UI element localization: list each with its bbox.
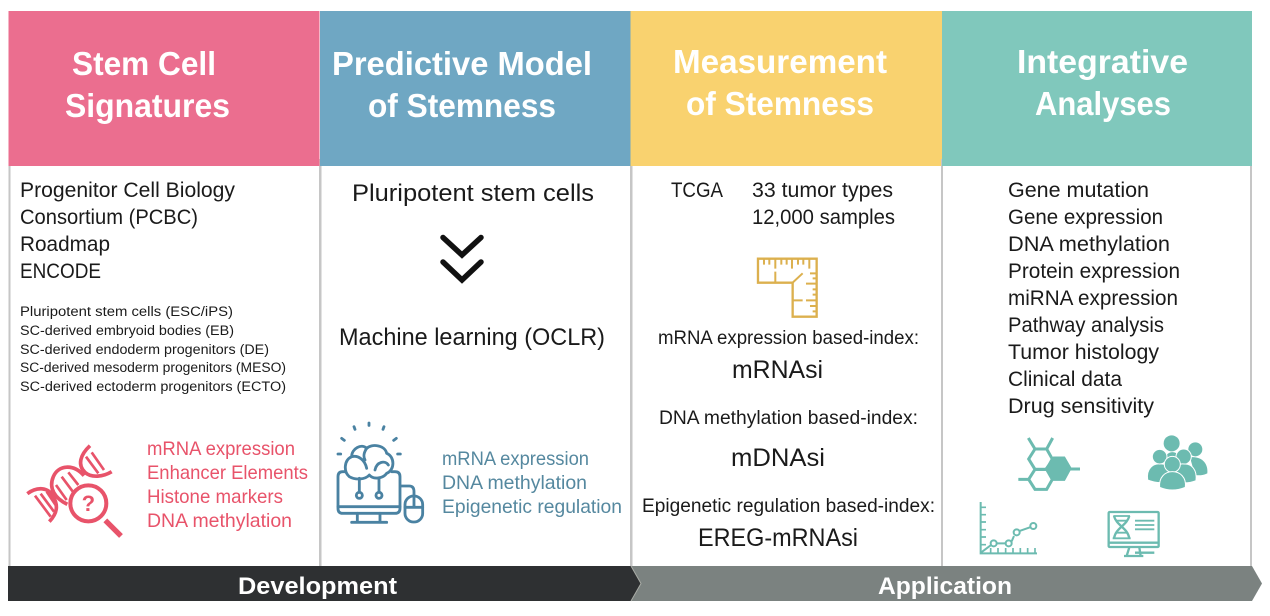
text: mrnasi: [658, 328, 919, 384]
text: model inputs: DNA methylation: [442, 472, 587, 494]
text: signature list: Enhancer Elements: [147, 462, 308, 484]
text: mrnasi: mRNA expression based-index:: [658, 328, 919, 349]
header: measurement: Measurement: [673, 43, 887, 80]
text: tcga: 33 tumor types: [752, 178, 893, 202]
text: data types: miRNA expression: [1008, 286, 1178, 310]
text: data sources: Progenitor Cell Biology: [20, 178, 235, 202]
arrow bar: development: Development: [238, 573, 397, 600]
arrow bar: development: [8, 566, 641, 601]
icon: brain computer: [338, 423, 423, 522]
text: model inputs: Epigenetic regulation: [442, 496, 622, 518]
panel: measurement of stemness: [630, 11, 942, 570]
panel: integrative analyses: [942, 11, 1252, 570]
icon: molecule: [1018, 438, 1080, 489]
text: cell types: SC-derived ectoderm progenitors (ECTO): [20, 379, 286, 394]
header: predictive model: [320, 11, 630, 166]
text: mdnasi: mDNAsi: [731, 444, 825, 472]
text: signature list: mRNA expression: [147, 438, 295, 460]
icon: people group: [1147, 435, 1207, 490]
text: data types: Gene mutation: [1008, 178, 1149, 202]
text: data sources: [20, 178, 235, 283]
header: stem cell signatures: [8, 11, 320, 166]
text: mrnasi: mRNAsi: [732, 356, 823, 384]
text: data types: Clinical data: [1008, 367, 1122, 391]
header: predictive model: Predictive Model: [332, 45, 592, 82]
text: data types: [1008, 178, 1180, 418]
arrow bar: application: [631, 566, 1262, 601]
text: data sources: Roadmap: [20, 232, 110, 256]
text: signature list: [147, 438, 308, 532]
header: measurement: [630, 11, 942, 166]
header: integrative analyses: Integrative: [1017, 43, 1188, 80]
text: data sources: ENCODE: [20, 259, 101, 283]
text: data types: Tumor histology: [1008, 340, 1159, 364]
header: stem cell signatures: Signatures: [65, 87, 230, 124]
text: cell types: SC-derived endoderm progenitors (DE): [20, 342, 269, 357]
panel: predictive model of stemness: [320, 11, 631, 570]
text: cell types: SC-derived mesoderm progenitors (MESO): [20, 360, 286, 375]
panel: stem cell signatures: [8, 11, 320, 570]
text: data types: Pathway analysis: [1008, 313, 1164, 337]
header: measurement: of Stemness: [686, 85, 874, 122]
icon: double chevron arrow: [443, 238, 481, 280]
text: pluripotent stem cells: Pluripotent stem cells: [352, 180, 594, 207]
text: cell types: SC-derived embryoid bodies (EB): [20, 323, 234, 338]
header: integrative analyses: Analyses: [1035, 85, 1171, 122]
text: data types: Gene expression: [1008, 205, 1163, 229]
text: model inputs: [442, 448, 622, 518]
text: cell types: Pluripotent stem cells (ESC/iPS): [20, 304, 233, 319]
text: ereg-mrnasi: EREG-mRNAsi: [698, 524, 858, 552]
text: signature list: DNA methylation: [147, 510, 292, 532]
header: stem cell signatures: Stem Cell: [72, 45, 216, 82]
icon: dna monitor: [1109, 512, 1159, 556]
arrow bar: application: Application: [878, 573, 1012, 600]
text: mdnasi: DNA methylation based-index:: [659, 408, 918, 429]
icon: dna magnifier: ?: [82, 491, 95, 516]
text: data types: Protein expression: [1008, 259, 1180, 283]
text: signature list: Histone markers: [147, 486, 283, 508]
text: tcga: 12,000 samples: [752, 205, 895, 229]
text: ereg-mrnasi: [642, 496, 935, 552]
text: data types: DNA methylation: [1008, 232, 1170, 256]
header: predictive model: of Stemness: [368, 87, 556, 124]
icon: ruler: [758, 259, 817, 317]
text: data sources: Consortium (PCBC): [20, 205, 198, 229]
text: machine learning: Machine learning (OCLR): [339, 324, 605, 351]
icon: line chart: [981, 502, 1037, 553]
header: integrative analyses: [942, 11, 1252, 166]
text: data types: Drug sensitivity: [1008, 394, 1154, 418]
text: tcga: [671, 178, 895, 229]
text: model inputs: mRNA expression: [442, 448, 589, 470]
text: tcga: TCGA: [671, 178, 724, 202]
icon: dna magnifier: [27, 446, 121, 536]
text: ereg-mrnasi: Epigenetic regulation based-index:: [642, 496, 935, 517]
text: mdnasi: [659, 408, 918, 472]
text: cell types: [20, 304, 286, 394]
